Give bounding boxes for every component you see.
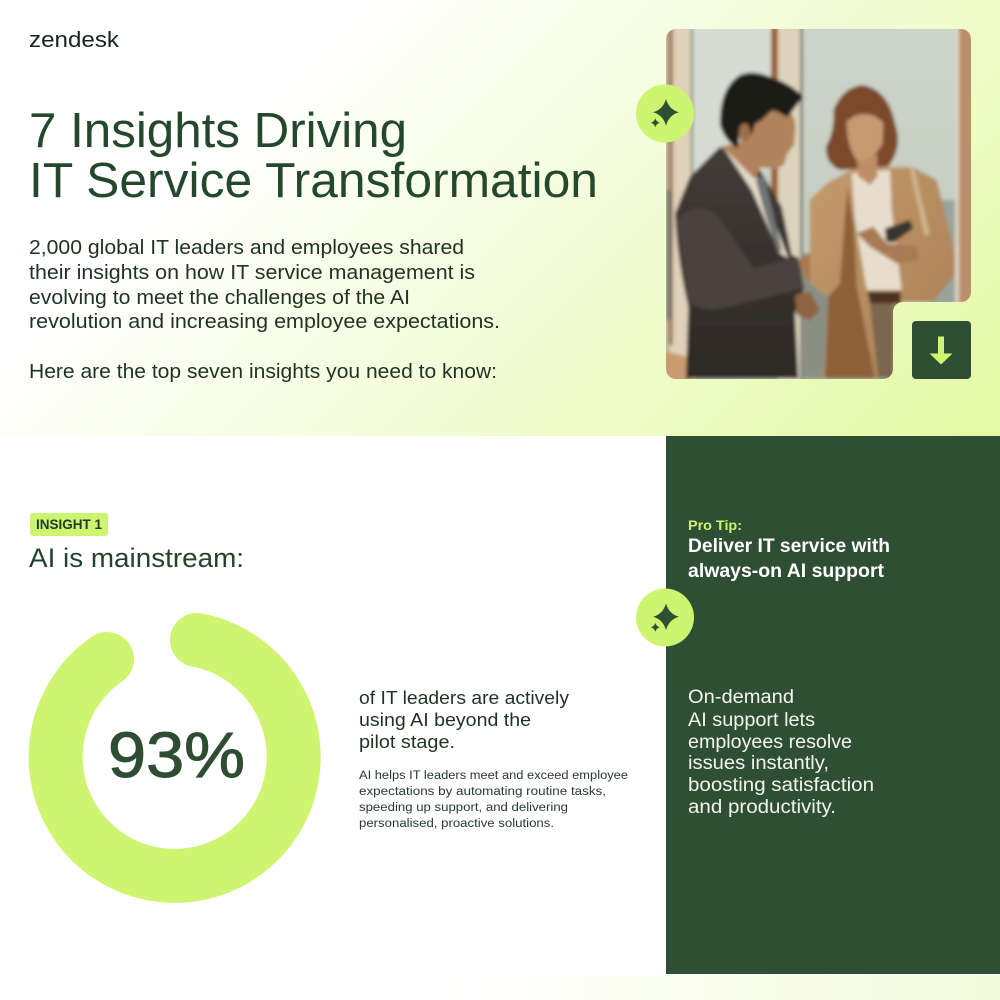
woman: bag strap	[909, 166, 929, 237]
intro text: Here are the top seven insights you need to know:	[29, 361, 497, 383]
man: second hand	[795, 292, 820, 320]
icon: sparkle badge top	[636, 84, 694, 142]
pro tip label: Pro Tip:	[688, 518, 742, 533]
pro tip body	[688, 687, 874, 818]
pro tip body: AI support lets	[688, 710, 815, 731]
woman: neck	[857, 155, 877, 185]
supporting text: AI helps IT leaders meet and exceed employee	[359, 770, 628, 782]
intro text: revolution and increasing employee expectations.	[29, 311, 500, 333]
woman: shirt	[852, 170, 902, 290]
pro tip body: employees resolve	[688, 732, 852, 753]
man: shirt collar and front	[722, 145, 788, 258]
man: tie	[756, 175, 782, 253]
supporting text: expectations by automating routine tasks,	[359, 786, 606, 798]
man: jacket cuff hand	[796, 253, 812, 282]
logo: zendesk: zendesk	[29, 27, 120, 52]
woman: skirt	[870, 303, 893, 378]
title: IT Service Transformation	[29, 154, 598, 208]
icon: sparkle badge pro tip	[636, 588, 694, 646]
man: sleeve	[677, 208, 804, 309]
supporting text: personalised, proactive solutions.	[359, 818, 554, 830]
phone: man	[837, 241, 870, 254]
intro text: evolving to meet the challenges of the AI	[29, 287, 410, 309]
city view	[802, 253, 830, 378]
statistic caption	[359, 688, 569, 752]
woman: hands	[857, 227, 918, 263]
pro tip heading	[688, 536, 890, 582]
panel: pro tip	[666, 436, 1000, 974]
woman: belt	[867, 292, 901, 303]
woman: jacket	[809, 167, 955, 378]
insight heading: AI is mainstream:	[29, 543, 244, 573]
title	[29, 104, 598, 208]
man: hair	[720, 73, 803, 148]
intro text: 2,000 global IT leaders and employees shared	[29, 237, 464, 259]
title: 7 Insights Driving	[29, 104, 407, 158]
pro tip heading: always-on AI support	[688, 561, 885, 582]
intro text: their insights on how IT service management is	[29, 262, 475, 284]
photo: two colleagues looking at phones	[660, 25, 975, 385]
donut chart: 93 percent	[56, 640, 294, 876]
pro tip body: issues instantly,	[688, 753, 829, 774]
intro text	[29, 237, 500, 383]
insight tag: INSIGHT 1	[36, 517, 102, 532]
woman: jacket shadow front	[825, 187, 875, 378]
man: ear	[739, 123, 750, 142]
pro tip body: On-demand	[688, 687, 794, 708]
hero background	[0, 0, 1000, 436]
woman: face	[847, 114, 883, 160]
woman: hair	[826, 85, 898, 170]
man: face and neck	[722, 108, 795, 179]
pro tip body: and productivity.	[688, 797, 836, 818]
value: 93%: 93%	[108, 719, 245, 791]
insight tag	[30, 513, 108, 536]
statistic caption: pilot stage.	[359, 732, 455, 752]
man: suit	[675, 147, 804, 378]
phone: woman	[885, 220, 913, 243]
statistic caption: using AI beyond the	[359, 710, 531, 730]
icon: down arrow	[930, 336, 952, 364]
statistic caption: of IT leaders are actively	[359, 688, 569, 708]
supporting text: speeding up support, and delivering	[359, 802, 568, 814]
pro tip body: boosting satisfaction	[688, 775, 874, 796]
pro tip heading: Deliver IT service with	[688, 536, 890, 557]
next section background strip	[0, 975, 1000, 1000]
download arrow button	[912, 321, 971, 379]
supporting text	[359, 770, 628, 830]
woman: fringe	[846, 115, 886, 123]
